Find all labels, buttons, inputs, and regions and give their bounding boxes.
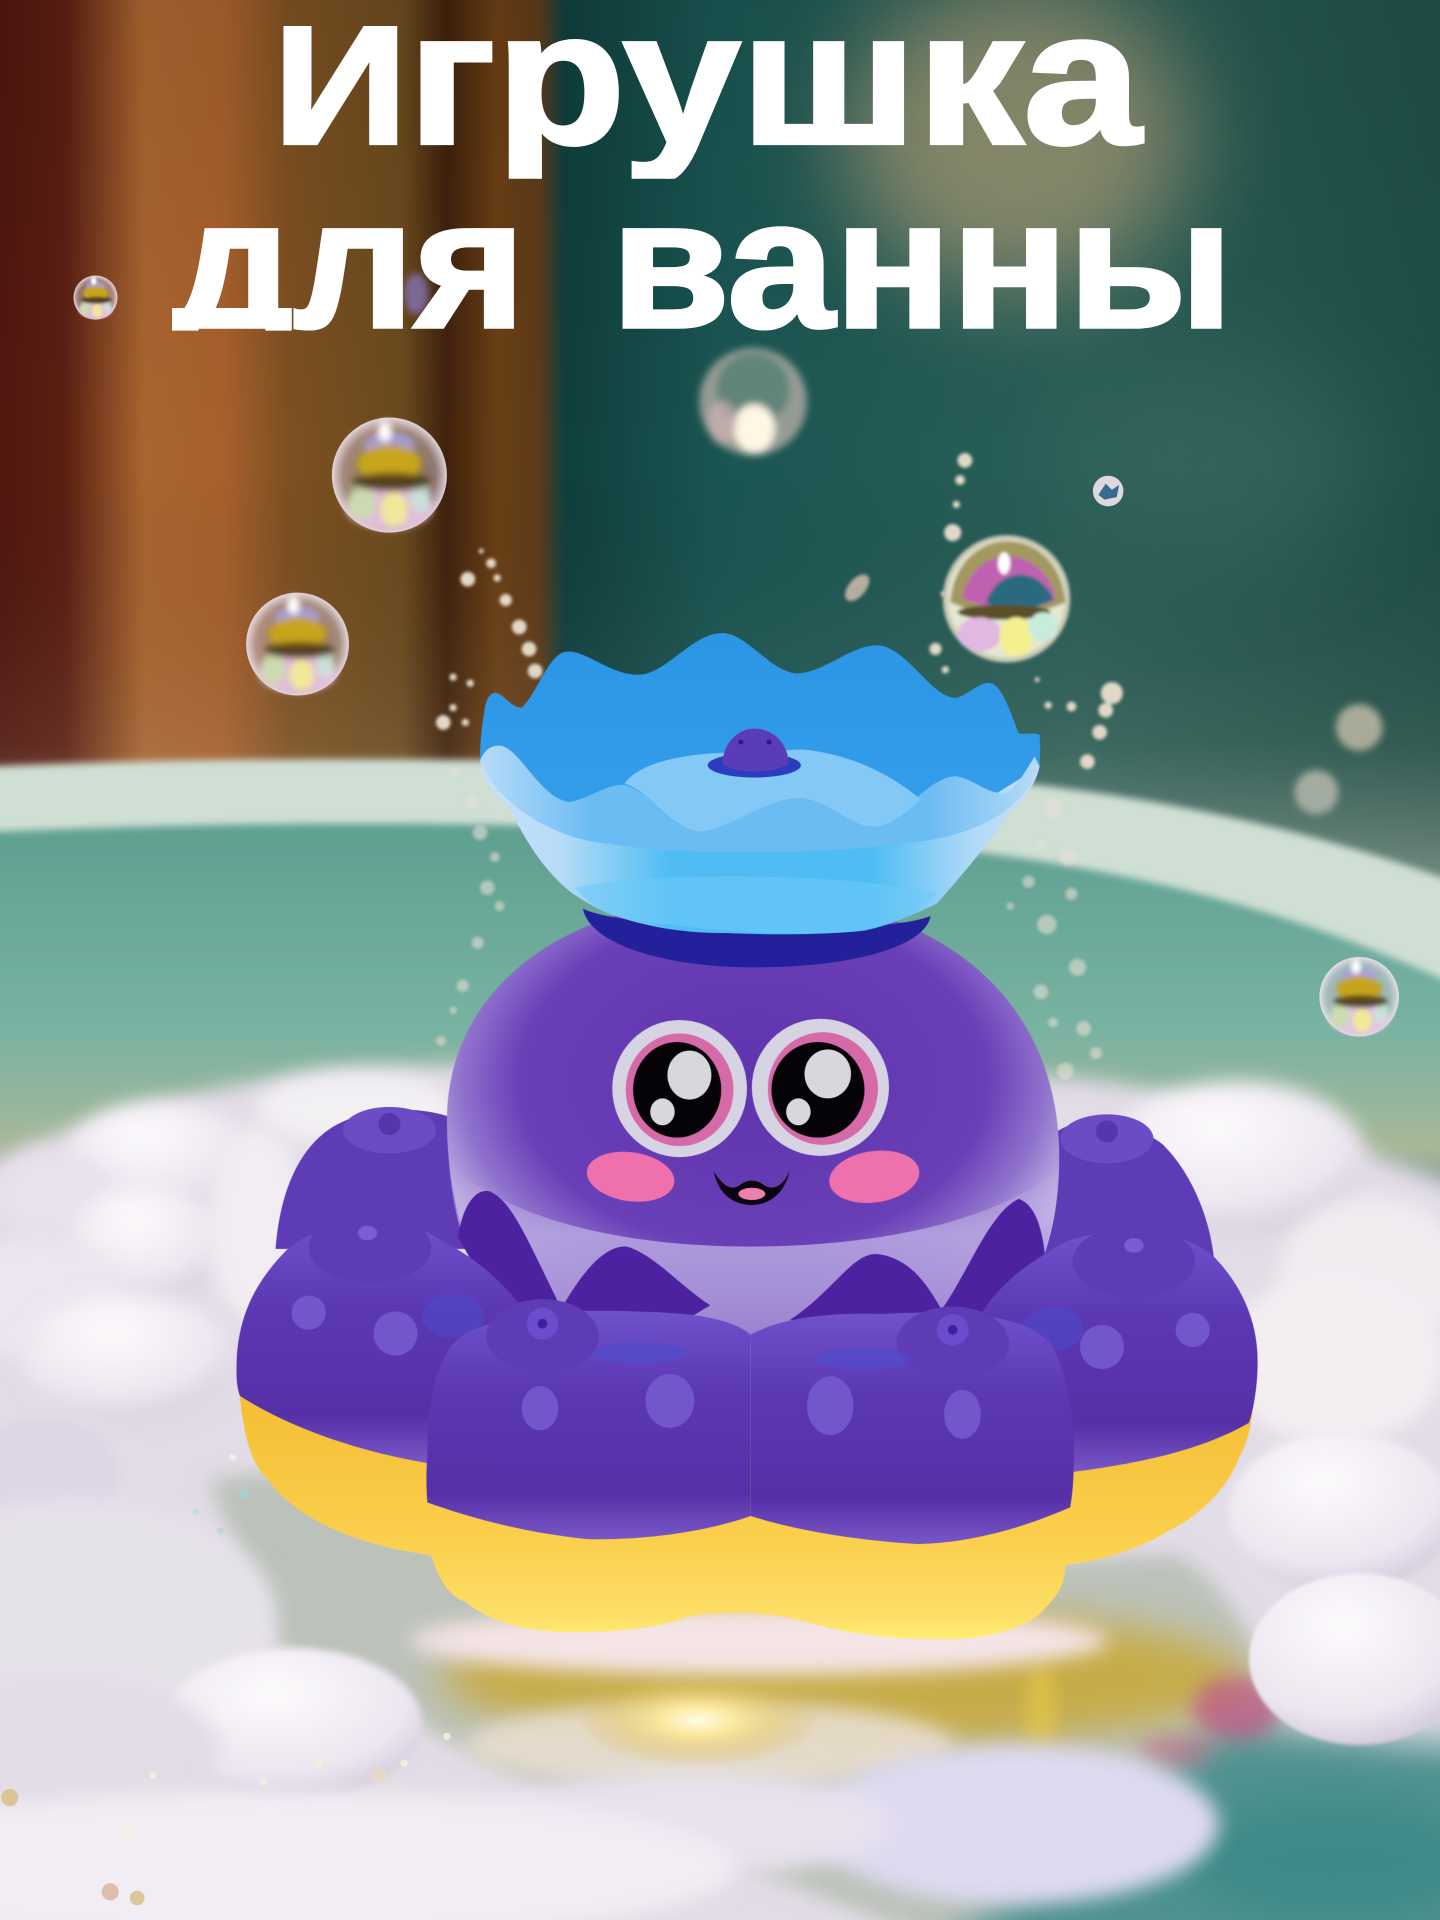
- head: [447, 896, 1059, 1341]
- blue bowl: [480, 633, 1040, 934]
- mouth: [714, 1171, 790, 1205]
- octopus toy: [236, 633, 1258, 1639]
- bubble behind title: [404, 273, 429, 315]
- title: [172, 26, 1222, 331]
- bowl rim band: [480, 746, 1040, 852]
- water splashes lower: [436, 767, 1102, 1080]
- bowl inner floor: [624, 749, 921, 831]
- bubble small left: [73, 276, 118, 320]
- front arm left: [426, 1299, 751, 1539]
- foam clumps foreground: [0, 1417, 1440, 1920]
- yellow base: [239, 1384, 1253, 1639]
- bowl nozzle: [708, 729, 801, 778]
- foam sparkles: [1, 1453, 451, 1905]
- water pool: [208, 1474, 1440, 1920]
- soap foam base: [0, 1065, 1440, 1920]
- bowl inner wall with wavy rim: [480, 633, 1040, 833]
- bathtub: [0, 759, 1440, 1273]
- background wall: [0, 0, 1440, 931]
- eye left: [612, 1020, 747, 1157]
- bubble far right: [1319, 957, 1399, 1037]
- side arm right: [980, 1226, 1258, 1472]
- cheek right: [826, 1145, 923, 1209]
- bowl body: [480, 747, 1040, 934]
- back arms: [276, 1107, 1215, 1267]
- title word dlya: для: [173, 161, 525, 366]
- title word vanny: ванны: [611, 161, 1233, 366]
- front arm right: [751, 1307, 1074, 1544]
- bubble middle left: [246, 593, 349, 696]
- cheek left: [584, 1146, 678, 1207]
- bubble top centre: [699, 348, 807, 456]
- bubble upper left: [332, 418, 447, 533]
- side arm left: [236, 1212, 529, 1463]
- bubbles: [73, 273, 1399, 1037]
- bowl base tint: [576, 876, 937, 933]
- tiny bubble: [1093, 476, 1123, 506]
- head tentacle folds: [458, 1191, 1046, 1341]
- water splashes upper: [436, 453, 1123, 769]
- title line 2: [172, 226, 1222, 331]
- eye right: [752, 1019, 889, 1156]
- bowl collar: [583, 909, 931, 967]
- blurred bubble two: [1294, 770, 1338, 814]
- bubble right of bowl: [943, 535, 1070, 662]
- blurred bubble one: [1336, 704, 1382, 751]
